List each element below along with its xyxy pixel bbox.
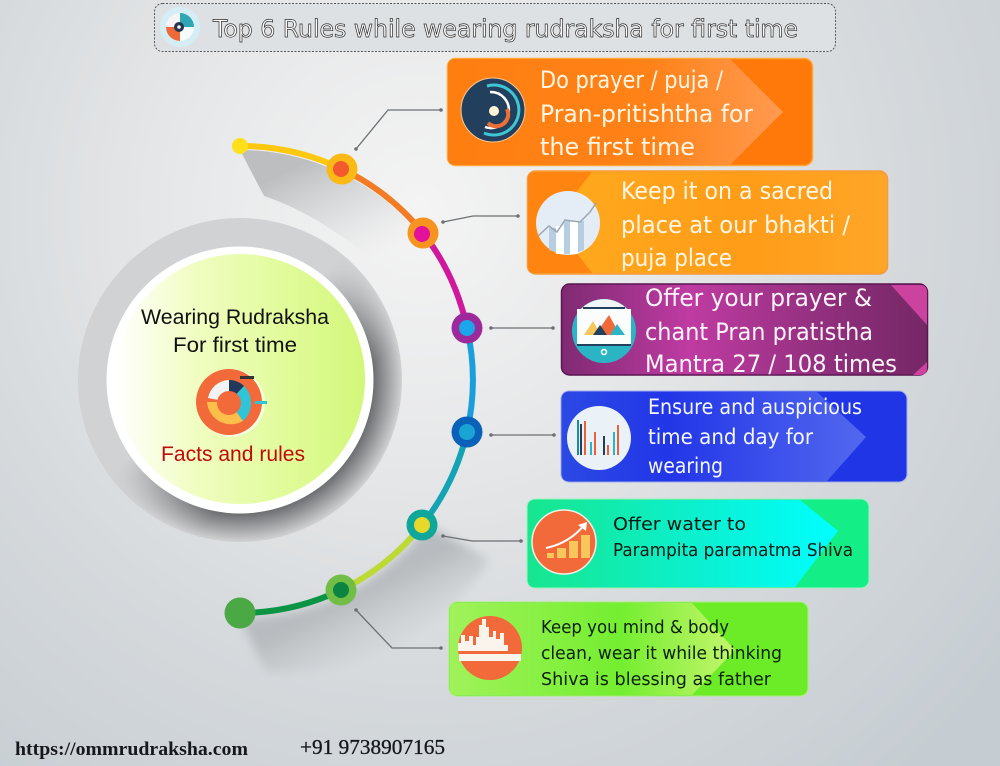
panel: rule 6 [449, 602, 808, 696]
rule 2 text: Keep it on a sacred [621, 177, 833, 205]
icon: city skyline [458, 616, 522, 680]
icon: title badge [160, 7, 200, 47]
icon: radial gauge [461, 78, 525, 142]
white rim [106, 246, 374, 514]
rule 4 text: wearing [648, 454, 723, 478]
node 7 end [224, 598, 256, 628]
icon: mountains on monitor [572, 299, 636, 363]
rule 4 text [648, 395, 862, 478]
footer website: https://ommrudraksha.com [15, 739, 248, 760]
rule 6 text: Shiva is blessing as father [541, 669, 772, 690]
panel: rule 2 [528, 171, 888, 274]
rule 5 text: Offer water to [613, 514, 746, 535]
rule 3 text: Mantra 27 / 108 times [645, 350, 897, 378]
rule 3 text [645, 284, 897, 378]
icon: growth chart [532, 510, 596, 574]
rule 2 text: place at our bhakti / [621, 211, 851, 239]
arc shadow: upper [240, 150, 470, 400]
panel: rule 3 [562, 284, 928, 378]
panel: rule 1 [448, 58, 812, 166]
panel: rule 4 [561, 391, 907, 482]
center caption: Facts and rules [161, 443, 305, 466]
rule 4 text: Ensure and auspicious [648, 395, 862, 419]
icon: donut chart [196, 369, 267, 437]
title bar [154, 4, 836, 52]
arc shadow: lower [240, 525, 490, 673]
rule 5 text [613, 514, 853, 561]
rule 2 text: puja place [621, 244, 732, 272]
node 1 [326, 154, 358, 184]
node 5 [406, 510, 438, 540]
node 6 [326, 574, 356, 606]
rule 1 text [540, 66, 753, 161]
connectors [356, 110, 554, 648]
icon: bar chart [567, 406, 631, 470]
rule 1 text: Pran-pritishtha for [540, 100, 753, 128]
rule 5 text: Parampita paramatma Shiva [613, 540, 853, 561]
rule 6 text: Keep you mind & body [541, 617, 729, 638]
timeline arc [224, 138, 482, 628]
node 4 [452, 416, 482, 448]
icon: line and bars [536, 191, 600, 255]
center circle panel [78, 218, 402, 542]
rule 3 text: Offer your prayer & [645, 284, 872, 312]
center heading: Wearing Rudraksha [141, 306, 329, 329]
rule 3 text: chant Pran pratistha [645, 318, 873, 346]
title text: Top 6 Rules while wearing rudraksha for first time [212, 15, 798, 43]
rule 6 text [541, 617, 782, 690]
rule 2 text [621, 177, 851, 272]
rule 6 text: clean, wear it while thinking [541, 643, 782, 664]
center subheading: For first time [173, 334, 297, 357]
rule 1 text: the first time [540, 133, 695, 161]
node 2 [408, 218, 438, 248]
node 3 [452, 312, 482, 344]
rule 1 text: Do prayer / puja / [540, 66, 724, 94]
rule 4 text: time and day for [648, 425, 813, 449]
footer phone: +91 9738907165 [300, 735, 445, 759]
grey outer ring [78, 218, 402, 542]
panel: rule 5 [527, 499, 869, 588]
node 0 start [232, 138, 248, 154]
